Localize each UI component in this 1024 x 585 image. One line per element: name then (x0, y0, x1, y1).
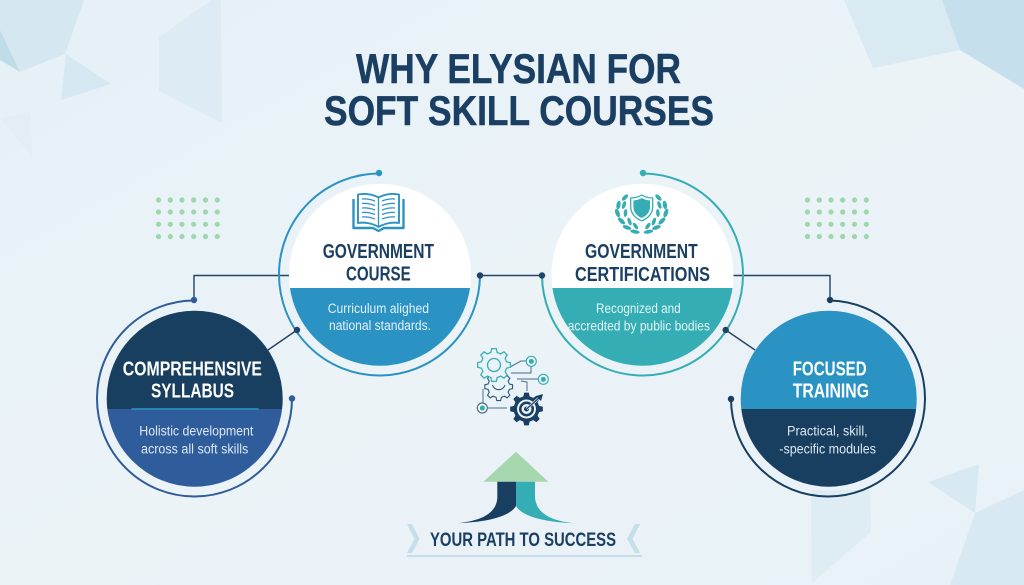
description: -specific modules (779, 441, 876, 456)
ring arc (279, 174, 480, 375)
description: Recognized and (596, 301, 681, 316)
heading: GOVERNMENT (323, 241, 434, 263)
gear teal (478, 349, 510, 381)
title: WHY ELYSIAN FOR (356, 45, 681, 92)
circle bottom (290, 288, 470, 366)
ring arc (731, 300, 925, 496)
gear navy outline (485, 373, 513, 401)
banner text: YOUR PATH TO SUCCESS (430, 530, 616, 551)
heading (575, 241, 710, 286)
accent line (132, 408, 258, 410)
panel: comprehensive syllabus (97, 297, 295, 496)
panel: focused training (728, 297, 925, 496)
arrow: path to success (457, 452, 575, 523)
description: Curriculum alighed (328, 301, 429, 316)
icon: shield with laurel (614, 193, 669, 234)
connector traces (483, 361, 538, 408)
banner: your path to success (407, 524, 642, 557)
circle bottom (552, 288, 732, 366)
description (139, 424, 254, 456)
panel: government certifications (539, 170, 743, 375)
ring arc (542, 174, 743, 375)
description (779, 424, 876, 456)
ring dots (728, 297, 833, 402)
description: across all soft skills (141, 441, 249, 456)
panel: government course (279, 170, 483, 375)
decorative dot grid: right (805, 197, 869, 239)
description (568, 301, 710, 334)
connector dot (294, 327, 300, 333)
circle bottom (741, 409, 916, 487)
ring dots (640, 170, 646, 176)
nodes (477, 356, 548, 413)
heading (793, 359, 869, 402)
heading: COURSE (346, 264, 411, 286)
description (328, 301, 431, 333)
heading: FOCUSED (793, 359, 867, 381)
circle top (552, 184, 734, 288)
circle bottom (107, 409, 282, 487)
icon: open book (354, 194, 404, 231)
target gear (510, 393, 543, 425)
connector dot (722, 327, 729, 333)
heading: SYLLABUS (151, 380, 234, 402)
decorative dot grid: left (156, 197, 220, 239)
title (324, 45, 714, 134)
heading: COMPREHENSIVE (123, 359, 262, 381)
ring arc (97, 300, 292, 496)
connector lines (194, 276, 830, 350)
circle top (740, 310, 917, 409)
ring dots (376, 170, 382, 176)
circle top (289, 184, 471, 288)
heading: TRAINING (793, 380, 869, 402)
description: accredted by public bodies (568, 318, 710, 334)
icon: gears and target (477, 349, 548, 425)
heading (323, 241, 434, 286)
ribbon (407, 524, 642, 557)
title: SOFT SKILL COURSES (324, 87, 714, 134)
description: Practical, skill, (787, 424, 868, 439)
description: national standards. (329, 318, 431, 333)
heading: CERTIFICATIONS (575, 264, 710, 286)
ring dots (191, 297, 295, 402)
circle top (106, 310, 283, 409)
description: Holistic development (139, 424, 254, 439)
heading: GOVERNMENT (585, 241, 698, 263)
heading (123, 359, 262, 402)
